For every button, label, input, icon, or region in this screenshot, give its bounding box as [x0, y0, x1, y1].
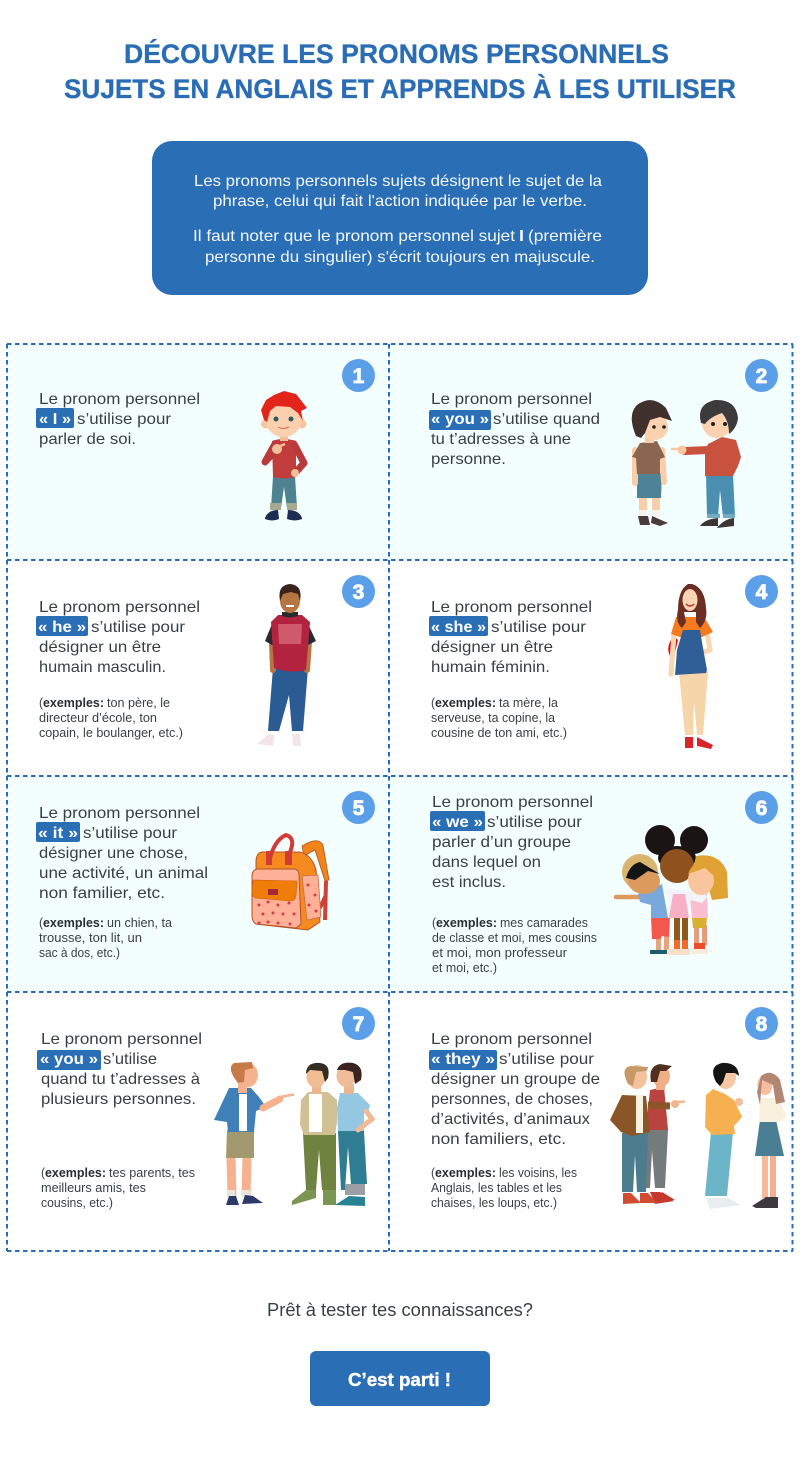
text: we: dans lequel on [432, 854, 541, 871]
text: we: de classe et moi, mes cousins [432, 931, 597, 945]
panel: pronoun she [429, 575, 778, 749]
text: they: ( [431, 1166, 436, 1180]
panel: pronoun he [36, 575, 375, 746]
badge 2: 2 [756, 365, 767, 388]
panel: introduction: phrase, celui qui fait l'action indiquée par le verbe. [213, 193, 587, 210]
text: you plural: plusieurs personnes. [41, 1091, 196, 1108]
text: they: désigner un groupe de [431, 1071, 600, 1088]
badge 4: 4 [756, 581, 768, 604]
badge 6: 6 [756, 797, 767, 820]
text: you plural: s’utilise [103, 1051, 157, 1068]
text: I: s’utilise pour [77, 411, 172, 428]
panel: pronoun they [429, 1007, 787, 1210]
illustration: three hugging children [616, 825, 728, 955]
panel: introduction: personne du singulier) s'écrit toujours en majuscule. [205, 249, 595, 266]
text: they: d’activités, d’animaux [431, 1111, 590, 1128]
text: I [36, 391, 200, 448]
text: she: exemples: [435, 696, 496, 710]
pronoun grid backgrounds [7, 344, 793, 1251]
text: they: personnes, de choses, [431, 1091, 593, 1108]
text: we: ( [432, 916, 437, 930]
illustration: boy pointing at two boys [214, 1062, 372, 1206]
text: they: non familiers, etc. [431, 1131, 566, 1148]
illustration: young man in red t-shirt [257, 584, 316, 746]
panel: pronoun you (singular) [429, 359, 778, 528]
badge 2 [745, 359, 778, 392]
text: I: parler de soi. [39, 431, 136, 448]
badge 7: 7 [353, 1013, 364, 1036]
text: it: désigner une chose, [39, 845, 188, 862]
text: she: ta mère, la [499, 696, 558, 710]
button: C’est parti ! [348, 1370, 451, 1390]
text: they: les voisins, les [499, 1166, 577, 1180]
text: it: ( [39, 916, 44, 930]
text: it: un chien, ta [107, 916, 172, 930]
call to action text: Prêt à tester tes connaissances? [267, 1300, 533, 1320]
text: it: « it » [38, 825, 78, 842]
text: you singular: personne. [431, 451, 506, 468]
text: it: exemples: [43, 916, 104, 930]
text: we: et moi, etc.) [432, 961, 497, 975]
text: he: ( [39, 696, 44, 710]
text: I: « I » [39, 411, 71, 428]
text: you plural: ( [41, 1166, 46, 1180]
badge 8: 8 [756, 1013, 768, 1036]
text: she: cousine de ton ami, etc.) [431, 726, 567, 740]
text: he [36, 599, 200, 740]
text: we: « we » [432, 814, 483, 831]
text: it: une activité, un animal [39, 865, 208, 882]
illustration: girl in denim overalls [668, 584, 713, 749]
text: we: parler d’un groupe [432, 834, 571, 851]
panel: pronoun we [430, 791, 778, 975]
badge 6 [745, 791, 778, 824]
text: you plural [37, 1031, 202, 1210]
text: he: copain, le boulanger, etc.) [39, 726, 183, 740]
text: she: « she » [431, 619, 486, 636]
illustration: orange backpack [252, 835, 329, 930]
text: she [429, 599, 592, 740]
text: he: ton père, le [107, 696, 170, 710]
badge 5: 5 [353, 797, 365, 820]
text: we: est inclus. [432, 874, 506, 891]
text: it: non familier, etc. [39, 885, 165, 902]
panel: pronoun it [36, 791, 375, 960]
text: he: Le pronom personnel [39, 599, 200, 616]
text: you singular: tu t’adresses à une [431, 431, 571, 448]
text: he: exemples: [43, 696, 104, 710]
text: you singular: « you » [431, 411, 489, 428]
badge 4 [745, 575, 778, 608]
text: you plural: Le pronom personnel [41, 1031, 202, 1048]
panel: introduction: I [519, 228, 524, 245]
text: you singular: s’utilise quand [493, 411, 600, 428]
text: she: s’utilise pour [491, 619, 587, 636]
text: she: Le pronom personnel [431, 599, 592, 616]
button [310, 1351, 490, 1406]
text: they: Le pronom personnel [431, 1031, 592, 1048]
badge 8 [745, 1007, 778, 1040]
text: we: Le pronom personnel [432, 794, 593, 811]
badge 7 [342, 1007, 375, 1040]
badge 1: 1 [353, 365, 365, 388]
title [64, 38, 736, 104]
text: she: désigner un être [431, 639, 553, 656]
title: SUJETS EN ANGLAIS ET APPRENDS À LES UTILISER [64, 73, 736, 104]
text: I: Le pronom personnel [39, 391, 200, 408]
text: they: « they » [431, 1051, 495, 1068]
badge 3 [342, 575, 375, 608]
text: it: trousse, ton lit, un [39, 931, 142, 945]
text: they: chaises, les loups, etc.) [431, 1196, 557, 1210]
panel: pronoun I [36, 359, 375, 520]
text: they: s’utilise pour [499, 1051, 595, 1068]
text: it: s’utilise pour [83, 825, 178, 842]
text: he: humain masculin. [39, 659, 166, 676]
badge 1 [342, 359, 375, 392]
panel: pronoun you (plural) [37, 1007, 375, 1210]
panel: introduction: (première [528, 228, 602, 245]
text: you plural: tes parents, tes [109, 1166, 195, 1180]
text: she: serveuse, ta copine, la [431, 711, 555, 725]
text: he: « he » [38, 619, 86, 636]
text: you plural: exemples: [45, 1166, 106, 1180]
text: we: exemples: [436, 916, 497, 930]
text: you singular: Le pronom personnel [431, 391, 592, 408]
illustration: four teenagers talking [610, 1063, 787, 1209]
badge 3: 3 [353, 581, 364, 604]
text: we [430, 794, 597, 975]
badge 5 [342, 791, 375, 824]
text: you singular [429, 391, 600, 468]
illustration: boy with red hair [261, 391, 307, 520]
text: it [36, 805, 208, 960]
text: we: mes camarades [500, 916, 588, 930]
text: he: s’utilise pour [91, 619, 186, 636]
panel: introduction: Les pronoms personnels sujets désignent le sujet de la [194, 173, 602, 190]
text: we: s’utilise pour [487, 814, 583, 831]
text: it: sac à dos, etc.) [39, 946, 120, 960]
text: we: et moi, mon professeur [432, 946, 567, 960]
panel: introduction: Il faut noter que le pronom personnel sujet [193, 228, 516, 245]
text: they [429, 1031, 600, 1210]
title: DÉCOUVRE LES PRONOMS PERSONNELS [124, 38, 669, 69]
illustration: two boys, one pointing [632, 400, 741, 528]
text: they: Anglais, les tables et les [431, 1181, 562, 1195]
text: she: ( [431, 696, 436, 710]
text: he: directeur d’école, ton [39, 711, 157, 725]
text: you plural: « you » [40, 1051, 98, 1068]
text: it: Le pronom personnel [39, 805, 200, 822]
text: she: humain féminin. [431, 659, 550, 676]
text: they: exemples: [435, 1166, 496, 1180]
text: you plural: quand tu t’adresses à [41, 1071, 200, 1088]
text: you plural: cousins, etc.) [41, 1196, 113, 1210]
panel: introduction [152, 141, 648, 295]
text: he: désigner un être [39, 639, 161, 656]
text: you plural: meilleurs amis, tes [41, 1181, 146, 1195]
